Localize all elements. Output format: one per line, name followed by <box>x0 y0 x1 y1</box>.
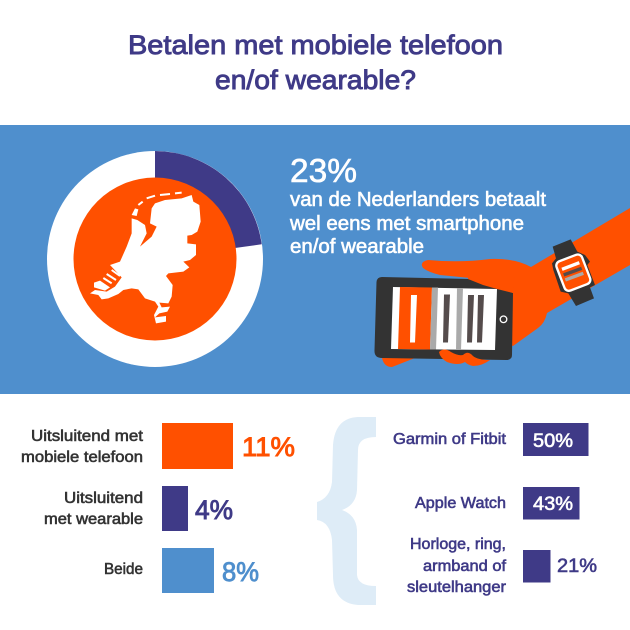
icon: curly brace <box>317 417 376 605</box>
title: Betalen met mobiele telefoon <box>128 30 503 60</box>
text: 23 percent statement: wel eens met smartphone <box>289 213 524 235</box>
label: Uitsluitend met mobiele telefoon: mobiele telefoon <box>21 449 143 466</box>
value: 8%: 8% <box>222 557 259 587</box>
label: Beide: Beide <box>104 561 143 578</box>
value: 43%: 43% <box>533 494 573 515</box>
bar: 11% <box>162 423 233 469</box>
label: Horloge, ring, armband of sleutelhanger: sleutelhanger <box>407 579 507 596</box>
text: 23 percent statement <box>289 152 546 258</box>
text: 23 percent statement: en/of wearable <box>290 236 424 258</box>
label: Uitsluitend met wearable: Uitsluitend <box>64 490 143 507</box>
icon: thumb over phone <box>468 268 515 293</box>
label: Uitsluitend met mobiele telefoon <box>21 428 144 466</box>
value: 4%: 4% <box>195 495 233 525</box>
icon: smartphone <box>374 277 513 360</box>
value: 50%: 50% <box>533 431 573 452</box>
icon: arm and hand <box>422 208 630 346</box>
text: 23 percent statement: 23% <box>290 152 357 189</box>
label: Uitsluitend met wearable: met wearable <box>44 511 143 528</box>
title: en/of wearable? <box>215 65 416 95</box>
illustration: hand with phone and smartwatch <box>374 208 630 367</box>
bar: 4% <box>162 486 188 531</box>
value: 11%: 11% <box>242 432 295 462</box>
icon: smartwatch <box>552 239 595 306</box>
panel: payment method bars <box>21 423 295 593</box>
bar: 43% <box>523 487 580 520</box>
label: Uitsluitend met wearable <box>44 490 143 528</box>
bar: 50% <box>523 423 588 456</box>
icon: map of the Netherlands <box>90 193 201 323</box>
label: Garmin of Fitbit: Garmin of Fitbit <box>393 431 507 448</box>
icon: fingers <box>439 350 490 366</box>
donut chart: 23% <box>47 151 263 367</box>
title <box>128 30 503 95</box>
label: Uitsluitend met mobiele telefoon: Uitsluitend met <box>31 428 144 445</box>
bar: 8% <box>162 548 214 593</box>
panel: blue banner <box>0 125 630 394</box>
label: Horloge, ring, armband of sleutelhanger <box>407 536 507 596</box>
icon: lower finger <box>382 358 415 367</box>
value: 21%: 21% <box>557 556 597 577</box>
label: Apple Watch: Apple Watch <box>415 495 506 512</box>
bar: 21% <box>523 550 550 582</box>
label: Horloge, ring, armband of sleutelhanger: armband of <box>423 558 507 575</box>
text: 23 percent statement: van de Nederlanders betaalt <box>290 189 546 211</box>
panel: wearable types <box>393 423 597 596</box>
label: Horloge, ring, armband of sleutelhanger: Horloge, ring, <box>410 536 506 553</box>
